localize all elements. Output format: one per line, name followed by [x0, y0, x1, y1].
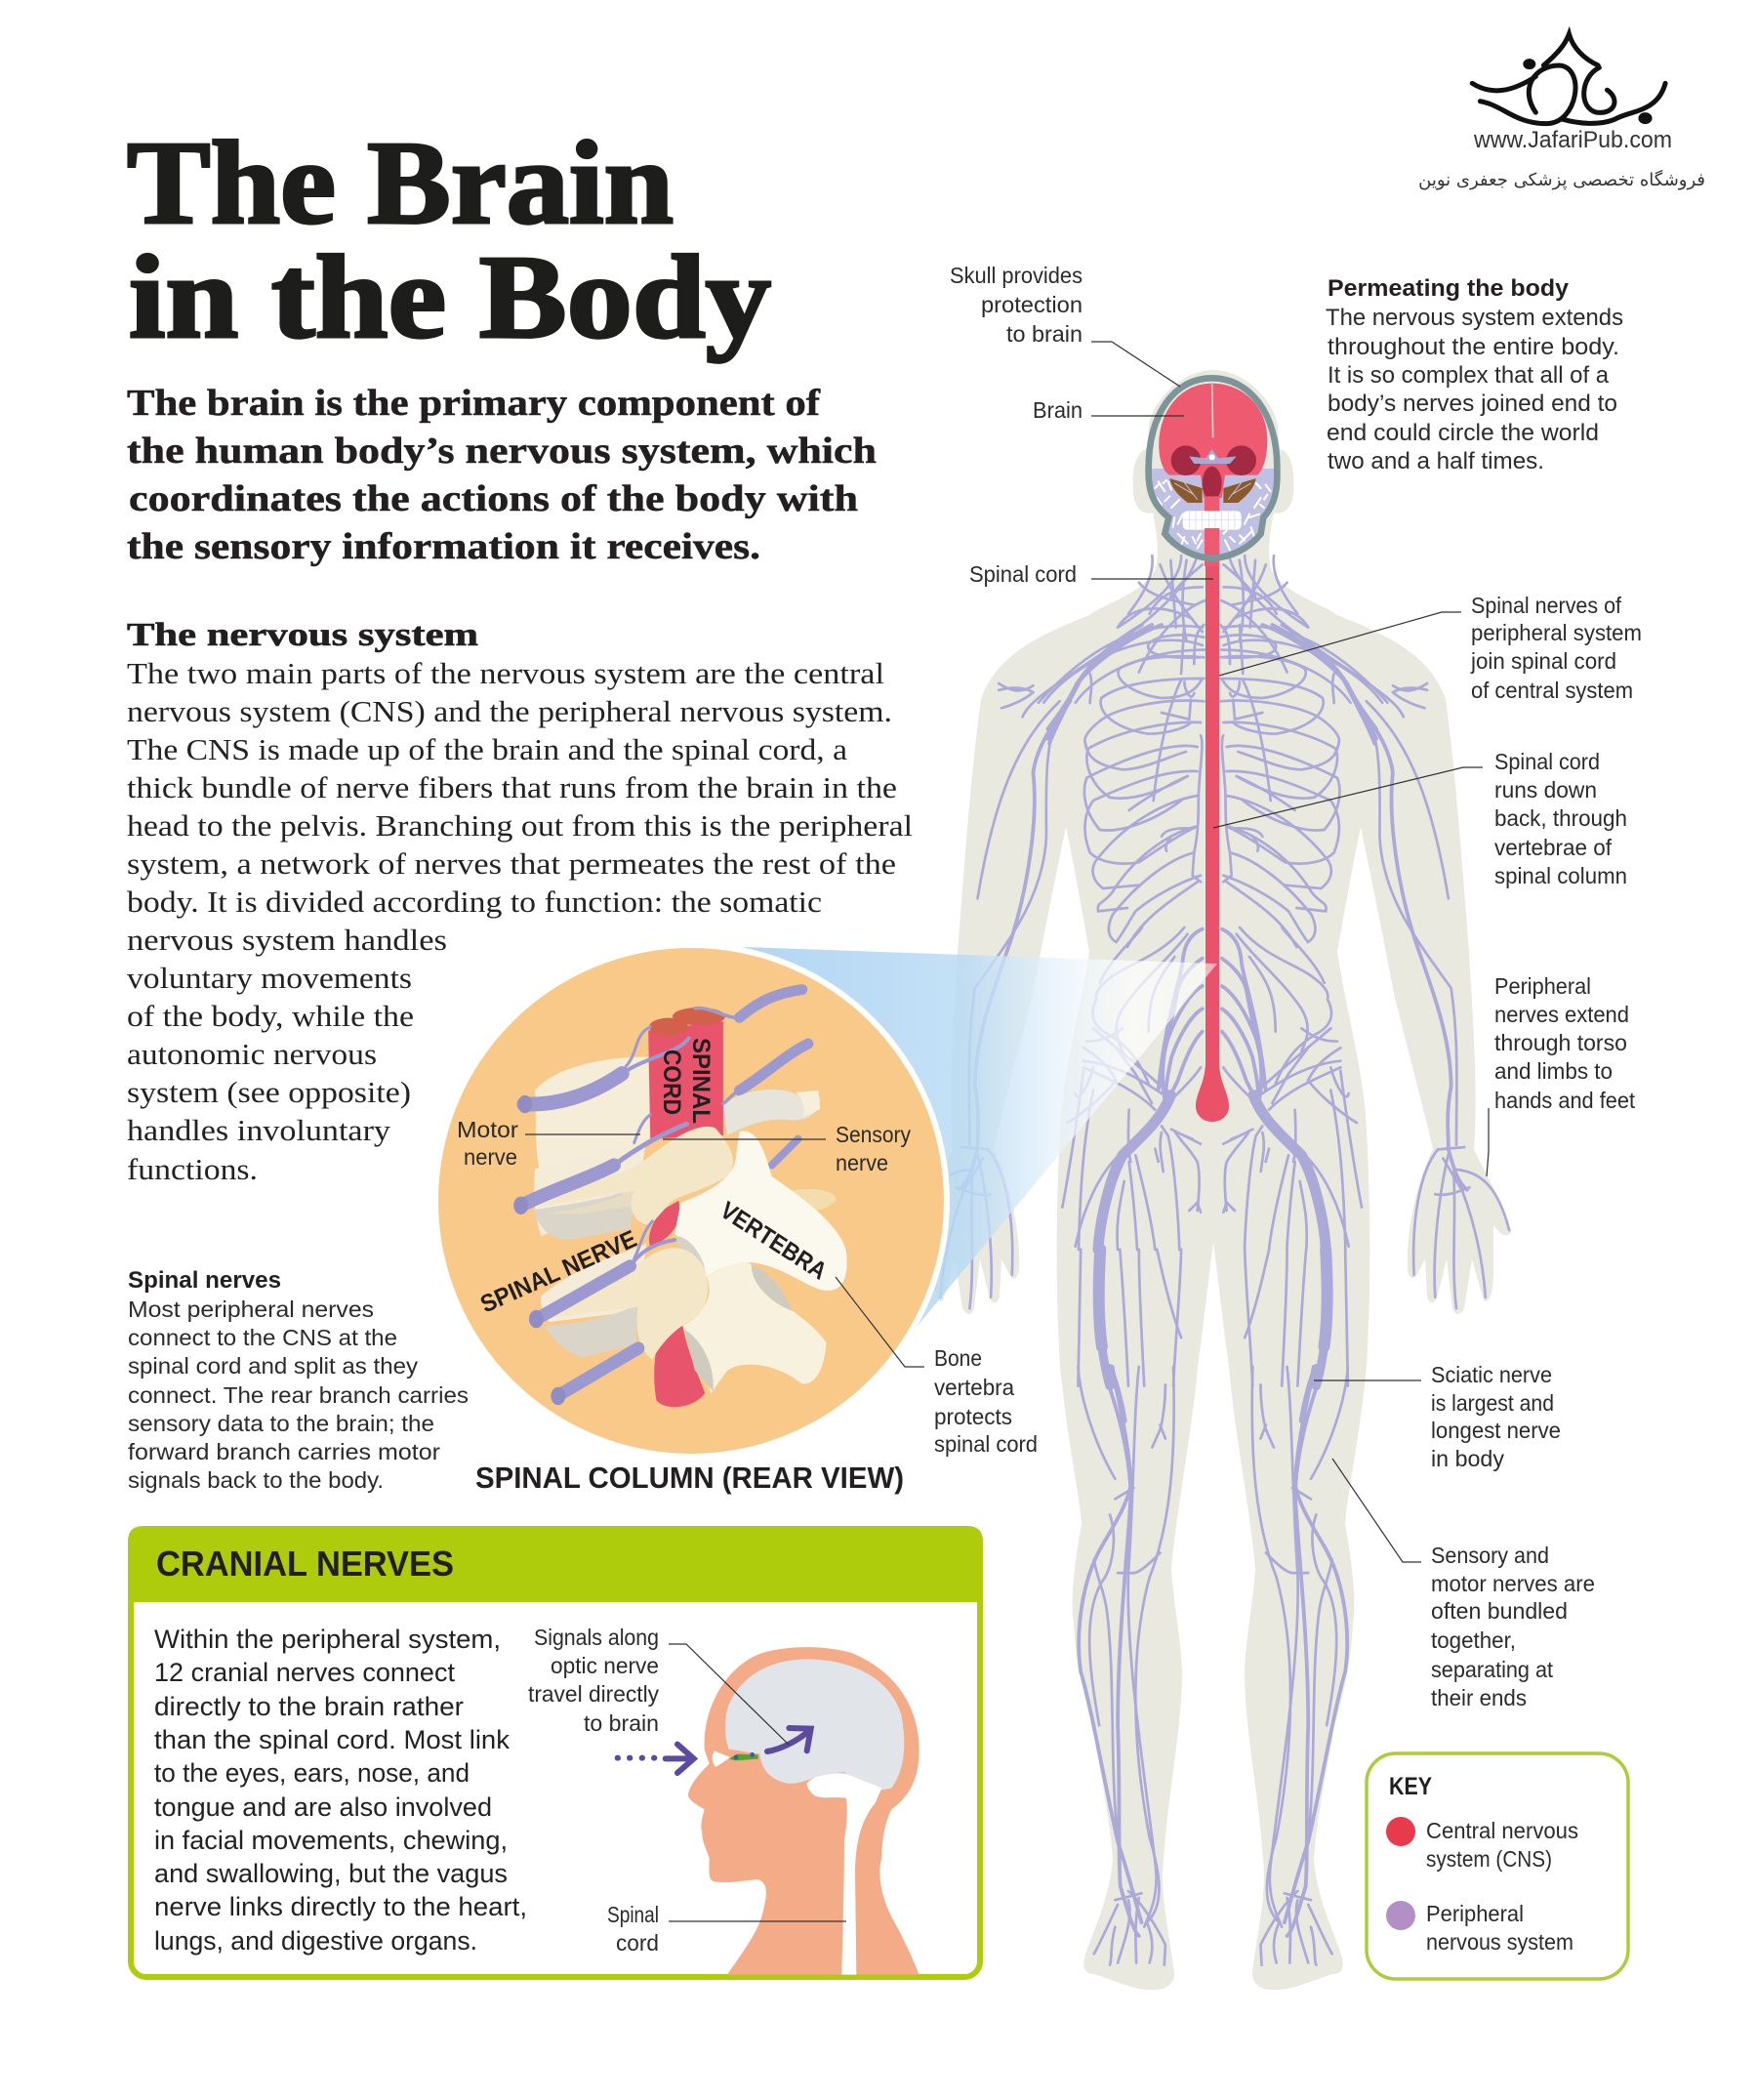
label: sensory and motor nerves: Sensory and: [1431, 1543, 1549, 1568]
text block: permeating the body: It is so complex that all of a: [1328, 362, 1610, 389]
head with skull and brain: [1149, 378, 1277, 566]
label: spinal cord runs down back: Spinal cord: [1494, 749, 1600, 774]
key: [1367, 1753, 1628, 1979]
nervous system body text: nervous system handles: [127, 923, 447, 957]
label: sensory and motor nerves: motor nerves are: [1431, 1571, 1595, 1596]
arrow: signal to brain: [767, 1728, 811, 1751]
title: in the Body: [129, 231, 771, 363]
body diagram: [916, 370, 1511, 1990]
text block: permeating the body: Permeating the body: [1328, 275, 1570, 302]
label: spinal nerves of peripheral system: [1219, 593, 1642, 703]
text block: spinal nerves: connect. The rear branch carries: [128, 1382, 469, 1408]
label: sciatic nerve: is largest and: [1431, 1390, 1554, 1416]
panel text: directly to the brain rather: [154, 1692, 464, 1721]
label: sensory and motor nerves: [1332, 1459, 1595, 1710]
label: spinal nerves of peripheral system: of central system: [1471, 678, 1633, 703]
nervous system body text: body. It is divided according to function: the somatic: [127, 885, 822, 919]
zoom wedge from torso to circle: [744, 947, 1217, 1326]
label: spinal cord runs down back: runs down: [1494, 777, 1597, 803]
label: skull provides protection: protection: [981, 292, 1083, 317]
label: sensory and motor nerves: together,: [1431, 1627, 1516, 1653]
label: signals along optic nerve: [528, 1625, 789, 1745]
peripheral nerves: arms and thighs: [917, 688, 1509, 1386]
peripheral nerves: pelvis: [1062, 927, 1362, 1250]
leader: bone vertebra: [836, 1277, 924, 1367]
key title: KEY: [1389, 1773, 1432, 1800]
label: sensory and motor nerves: their ends: [1431, 1685, 1527, 1710]
intro paragraph: [127, 383, 877, 567]
label: spinal nerves of peripheral system: peripheral system: [1471, 620, 1642, 645]
nervous system body text: functions.: [127, 1152, 258, 1186]
text block: permeating the body: throughout the entire body.: [1328, 334, 1619, 360]
key item: pns: Peripheral: [1426, 1901, 1524, 1926]
label: bone vertebra protects spinal cord: [934, 1345, 1038, 1457]
orange circle background: [438, 948, 944, 1454]
panel text: to the eyes, ears, nose, and: [154, 1758, 470, 1788]
label: sciatic nerve: longest nerve: [1431, 1418, 1561, 1443]
label: spinal nerve: SPINAL NERVE: [476, 1225, 641, 1318]
panel text: tongue and are also involved: [154, 1792, 492, 1822]
logo url: www.JafariPub.com: [1473, 127, 1672, 153]
nervous system body text: system (see opposite): [127, 1075, 411, 1109]
label: sensory and motor nerves: separating at: [1431, 1657, 1554, 1682]
label: motor nerve: Motor: [457, 1117, 518, 1142]
label: brain: Brain: [1033, 397, 1083, 423]
panel header band: [128, 1526, 983, 1602]
text block: spinal nerves: signals back to the body.: [128, 1467, 384, 1493]
peripheral nerves: shoulders: [999, 556, 1427, 717]
key item: cns: system (CNS): [1426, 1846, 1552, 1872]
peripheral nerves: ribs: [1047, 625, 1376, 947]
label: peripheral nerves extend: and limbs to: [1494, 1058, 1613, 1084]
logo: [1418, 34, 1705, 190]
head profile diagram: [688, 1647, 919, 1975]
label: bone vertebra protects spinal cord: vertebra: [934, 1375, 1014, 1400]
text block: spinal nerves: forward branch carries motor: [128, 1439, 440, 1464]
label: peripheral nerves extend: [1487, 973, 1636, 1176]
label: spinal nerves of peripheral system: join spinal cord: [1470, 648, 1616, 674]
nervous system body text: head to the pelvis. Branching out from this is the peripheral: [127, 808, 913, 843]
text block: permeating the body: [1326, 275, 1623, 474]
circle: spinal column illustration: [432, 942, 950, 1460]
panel text: Within the peripheral system,: [154, 1625, 501, 1654]
text block: spinal nerves: sensory data to the brain; the: [128, 1411, 434, 1436]
nervous system body text: system, a network of nerves that permeates the rest of the: [127, 846, 896, 881]
panel text: 12 cranial nerves connect: [154, 1658, 455, 1687]
label: skull provides protection: [950, 263, 1180, 387]
nervous system body text: nervous system (CNS) and the peripheral nervous system.: [127, 694, 892, 728]
label: sensory nerve: [663, 1122, 911, 1175]
spinal cord: [1196, 547, 1229, 1122]
panel frame: [131, 1529, 980, 1977]
text block: spinal nerves: Most peripheral nerves: [128, 1297, 374, 1322]
key item: pns: [1386, 1901, 1573, 1955]
panel text: [154, 1625, 527, 1956]
panel text: than the spinal cord. Most link: [154, 1725, 511, 1754]
intro paragraph: coordinates the actions of the body with: [129, 478, 858, 519]
body silhouette: [916, 370, 1511, 1990]
label: signals along optic nerve: Signals along: [534, 1625, 659, 1650]
panel: cranial nerves: [128, 1526, 983, 1977]
text block: permeating the body: body’s nerves joined end to: [1328, 391, 1617, 417]
panel text: and swallowing, but the vagus: [154, 1859, 508, 1888]
logo mark: [1472, 34, 1665, 124]
label: spinal cord runs down back: back, through: [1494, 805, 1627, 831]
text block: spinal nerves: connect to the CNS at the: [128, 1325, 397, 1350]
nervous system body text: The two main parts of the nervous system are the central: [127, 656, 884, 690]
label: motor nerve: [457, 1117, 640, 1170]
label: bone vertebra protects spinal cord: spinal cord: [934, 1431, 1038, 1457]
label: spinal cord runs down back: vertebrae of: [1494, 835, 1613, 860]
label: skull provides protection: Skull provides: [950, 263, 1083, 288]
nervous system body text: autonomic nervous: [127, 1037, 377, 1071]
label: spinal cord runs down back: [1213, 749, 1627, 888]
text block: spinal nerves: spinal cord and split as they: [128, 1353, 419, 1379]
label: peripheral nerves extend: nerves extend: [1494, 1002, 1629, 1027]
label: sciatic nerve: Sciatic nerve: [1431, 1362, 1552, 1387]
vertebrae, cord and nerves: [513, 990, 847, 1407]
white rim: [432, 942, 950, 1460]
caption: spinal column: SPINAL COLUMN (REAR VIEW): [475, 1461, 904, 1495]
label: peripheral nerves extend: hands and feet: [1494, 1088, 1636, 1113]
label: signals along optic nerve: optic nerve: [551, 1653, 659, 1678]
label: skull provides protection: to brain: [1006, 321, 1083, 347]
label: spinal nerves of peripheral system: Spinal nerves of: [1471, 593, 1622, 618]
label: spinal cord: Spinal cord: [969, 561, 1077, 587]
label: spinal cord: Spinal: [607, 1902, 659, 1927]
heading: the nervous system: The nervous system: [127, 617, 478, 653]
label: peripheral nerves extend: Peripheral: [1494, 973, 1591, 999]
label: bone vertebra protects spinal cord: Bone: [934, 1345, 982, 1371]
intro paragraph: the human body’s nervous system, which: [127, 431, 877, 472]
label: peripheral nerves extend: through torso: [1494, 1030, 1627, 1055]
label: spinal cord runs down back: spinal column: [1494, 863, 1627, 888]
panel text: lungs, and digestive organs.: [154, 1926, 477, 1956]
nervous system body text: [127, 656, 913, 1186]
title: The Brain: [127, 117, 674, 249]
label: sensory nerve: Sensory: [836, 1122, 911, 1147]
label: spinal cord: SPINAL: [687, 1038, 715, 1124]
label: signals along optic nerve: to brain: [584, 1710, 659, 1736]
text block: spinal nerves: Spinal nerves: [128, 1267, 281, 1294]
text block: permeating the body: two and a half times.: [1328, 448, 1544, 474]
label: spinal cord: [658, 1038, 715, 1124]
logo persian tagline: فروشگاه تخصصی پزشکی جعفری نوین: [1418, 169, 1705, 190]
key item: cns: [1386, 1817, 1578, 1872]
nervous system body text: handles involuntary: [127, 1113, 391, 1147]
nervous system body text: The CNS is made up of the brain and the spinal cord, a: [127, 732, 847, 766]
label: spinal cord: cord: [616, 1930, 659, 1956]
label: spinal cord: [607, 1902, 846, 1956]
text block: permeating the body: end could circle the world: [1327, 420, 1599, 446]
title: [127, 117, 771, 363]
nervous system body text: thick bundle of nerve fibers that runs from the brain in the: [127, 770, 897, 804]
panel text: nerve links directly to the heart,: [154, 1892, 527, 1921]
text block: permeating the body: The nervous system extends: [1326, 305, 1623, 331]
intro paragraph: the sensory information it receives.: [127, 526, 760, 567]
intro paragraph: The brain is the primary component of: [127, 383, 822, 424]
key frame: [1367, 1753, 1628, 1979]
label: sensory nerve: nerve: [836, 1150, 888, 1175]
label: vertebra: VERTEBRA: [715, 1197, 832, 1286]
nervous system body text: of the body, while the: [127, 999, 414, 1033]
arrow: incoming light: [618, 1745, 694, 1773]
peripheral nerves: legs and feet: [1078, 1367, 1348, 1965]
label: bone vertebra protects spinal cord: protects: [934, 1404, 1012, 1429]
label: sciatic nerve: [1314, 1362, 1561, 1471]
label: sciatic nerve: in body: [1431, 1446, 1504, 1471]
label: signals along optic nerve: travel directly: [528, 1681, 659, 1707]
key item: pns: nervous system: [1426, 1929, 1573, 1955]
panel heading: CRANIAL NERVES: [156, 1544, 454, 1584]
panel text: in facial movements, chewing,: [154, 1826, 508, 1855]
key item: cns: Central nervous: [1426, 1818, 1578, 1843]
label: sensory and motor nerves: often bundled: [1431, 1598, 1568, 1624]
label: motor nerve: nerve: [464, 1144, 517, 1170]
text block: spinal nerves: [128, 1267, 469, 1493]
label: spinal cord: CORD: [658, 1050, 685, 1115]
nervous system body text: voluntary movements: [127, 961, 412, 995]
